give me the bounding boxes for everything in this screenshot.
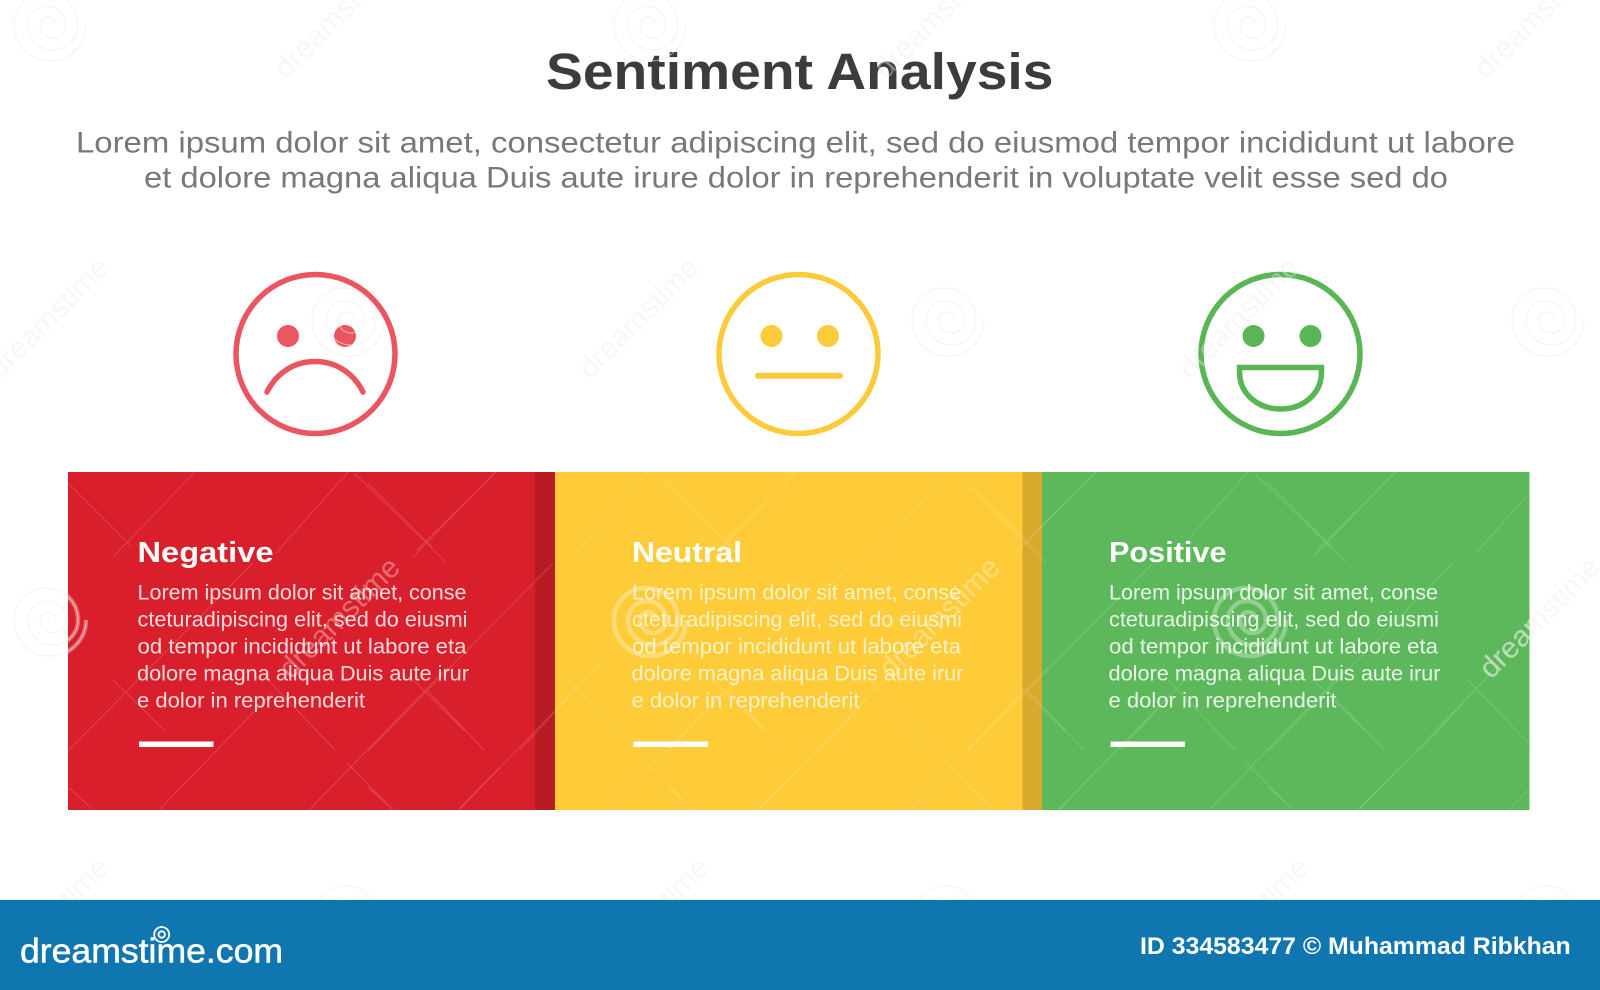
panel: negative [68,472,555,810]
text block: positive description: Lorem ipsum dolor sit amet, conse [1109,580,1438,604]
text block: negative description: e dolor in reprehenderit [137,688,365,712]
heading: Negative: Negative [138,537,274,569]
panel: positive [1042,472,1530,810]
text block: negative description [137,580,469,712]
heading: Neutral: Neutral [632,537,742,569]
stock watermark overlay: dreamstime [1182,851,1316,985]
text block: positive description [1108,580,1440,712]
title: Sentiment Analysis [546,43,1054,100]
text block: neutral description [632,580,964,712]
stock watermark overlay: dreamstime [1172,251,1306,385]
text block: neutral description: dolore magna aliqua Duis aute irur [632,662,964,686]
icon: sad face [236,274,395,434]
text block: neutral description: Lorem ipsum dolor sit amet, conse [632,580,961,604]
stock watermark overlay: dreamstime [873,551,1007,685]
subtitle text block [76,127,1515,195]
accent line: negative [139,742,214,747]
accent line: positive [1110,742,1185,747]
stock watermark overlay: dreamstime [582,851,716,985]
stock watermark overlay: dreamstime [273,551,407,685]
icon: neutral face [719,274,878,434]
text block: neutral description: e dolor in reprehenderit [632,688,860,712]
panel: neutral [555,472,1042,810]
stock watermark overlay: dreamstime [572,251,706,385]
footer credit text: ID 334583477 © Muhammad Ribkhan [1140,933,1571,960]
text block: positive description: od tempor incididunt ut labore eta [1109,634,1438,658]
text block: positive description: e dolor in reprehenderit [1108,688,1337,712]
icon: happy face [1201,274,1360,434]
text block: neutral description: od tempor incididunt ut labore eta [632,634,961,658]
subtitle text block: et dolore magna aliqua Duis aute irure dolor in reprehenderit in voluptate velit esse sed do [144,162,1448,195]
subtitle text block: Lorem ipsum dolor sit amet, consectetur adipiscing elit, sed do eiusmod tempor incididunt ut labore [76,127,1515,160]
footer logo spiral icon [154,927,169,942]
text block: positive description: cteturadipiscing elit, sed do eiusmi [1109,608,1439,632]
footer bar [0,900,1600,990]
text block: negative description: Lorem ipsum dolor sit amet, conse [138,580,466,604]
panel shade: negative edge [535,472,555,810]
text block: neutral description: cteturadipiscing elit, sed do eiusmi [632,608,962,632]
accent line: neutral [634,742,708,747]
panel shade: neutral edge [1022,472,1042,810]
footer logo text: dreamstime.com [20,933,283,971]
text block: negative description: dolore magna aliqua Duis aute irur [137,662,469,686]
text block: negative description: cteturadipiscing elit, sed do eiusmi [138,608,468,632]
text block: positive description: dolore magna aliqua Duis aute irur [1108,662,1440,686]
text block: negative description: od tempor incididunt ut labore eta [138,634,467,658]
heading: Positive: Positive [1109,537,1226,569]
